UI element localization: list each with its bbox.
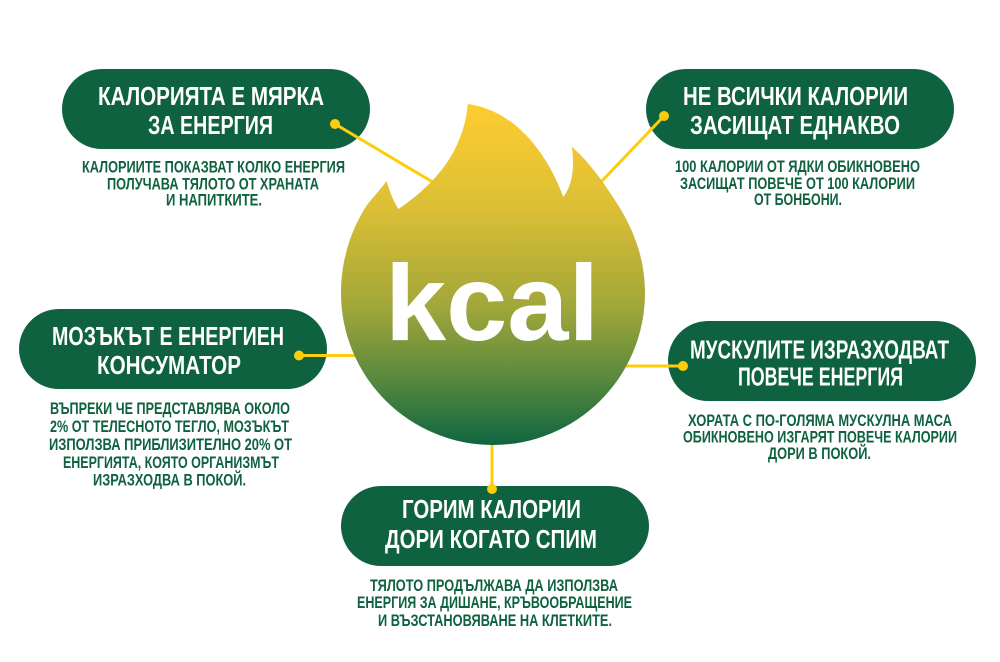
pill: brain heading <box>19 309 327 389</box>
text: brain description: ИЗРАЗХОДВА В ПОКОЙ. <box>93 470 246 490</box>
text: calorie description: КАЛОРИИТЕ ПОКАЗВАТ КОЛКО ЕНЕРГИЯ <box>82 158 345 176</box>
text: muscles description <box>683 412 957 463</box>
text: calorie description: И НАПИТКИТЕ. <box>166 192 262 210</box>
text: brain description: 2% ОТ ТЕЛЕСНОТО ТЕГЛО, МОЗЪКЪТ <box>50 418 289 436</box>
text: satiety description: ОТ БОНБОНИ. <box>754 191 842 209</box>
text: sleep description: И ВЪЗСТАНОВЯВАНЕ НА КЛЕТКИТЕ. <box>378 612 612 630</box>
panel: not all calories satiate equally <box>646 69 954 209</box>
pill: sleep heading: ГОРИМ КАЛОРИИ <box>402 494 581 524</box>
flame shape <box>341 104 645 445</box>
text: muscles description: ДОРИ В ПОКОЙ. <box>768 444 871 463</box>
text: calorie description: ПОЛУЧАВА ТЯЛОТО ОТ ХРАНАТА <box>107 176 319 194</box>
pill: satiety heading: ЗАСИЩАТ ЕДНАКВО <box>690 110 900 140</box>
pill: brain heading: КОНСУМАТОР <box>97 350 241 380</box>
text: brain description: ВЪПРЕКИ ЧЕ ПРЕДСТАВЛЯВА ОКОЛО <box>50 400 290 418</box>
pill: satiety heading: НЕ ВСИЧКИ КАЛОРИИ <box>683 81 908 111</box>
pill: satiety heading <box>646 69 954 149</box>
pill: calorie heading <box>62 69 370 149</box>
connectors: yellow lines and dots from flame to pills <box>294 112 688 494</box>
panel: muscles use more energy <box>668 321 976 463</box>
text: satiety description: 100 КАЛОРИИ ОТ ЯДКИ ОБИКНОВЕНО <box>675 158 920 176</box>
pill: muscles heading: ПОВЕЧЕ ЕНЕРГИЯ <box>738 362 903 392</box>
panel: brain is an energy consumer <box>19 309 327 490</box>
pill: muscles heading <box>668 321 976 401</box>
icon: flame with kcal label <box>341 104 645 445</box>
pill: sleep heading: ДОРИ КОГАТО СПИМ <box>385 524 597 554</box>
pill: calorie heading: КАЛОРИЯТА Е МЯРКА <box>98 81 324 111</box>
pill: sleep heading <box>341 486 649 566</box>
text: calorie description <box>82 158 345 210</box>
text: satiety description <box>675 158 920 209</box>
text: satiety description: ЗАСИЩАТ ПОВЕЧЕ ОТ 100 КАЛОРИИ <box>680 175 915 193</box>
panel: calorie is a measure of energy <box>62 69 370 210</box>
kcal text: kcal <box>385 242 599 363</box>
text: brain description: ЕНЕРГИЯТА, КОЯТО ОРГАНИЗМЪТ <box>63 454 279 472</box>
pill: calorie heading: ЗА ЕНЕРГИЯ <box>148 110 273 140</box>
text: sleep description: ЕНЕРГИЯ ЗА ДИШАНЕ, КРЪВООБРАЩЕНИЕ <box>357 594 632 612</box>
text: sleep description: ТЯЛОТО ПРОДЪЛЖАВА ДА ИЗПОЛЗВА <box>370 577 618 595</box>
pill: brain heading: МОЗЪКЪТ Е ЕНЕРГИЕН <box>52 321 284 351</box>
text: brain description <box>49 400 292 490</box>
text: sleep description <box>357 577 632 630</box>
panel: we burn calories even when sleeping <box>341 486 649 630</box>
text: brain description: ИЗПОЛЗВА ПРИБЛИЗИТЕЛНО 20% ОТ <box>49 436 292 454</box>
